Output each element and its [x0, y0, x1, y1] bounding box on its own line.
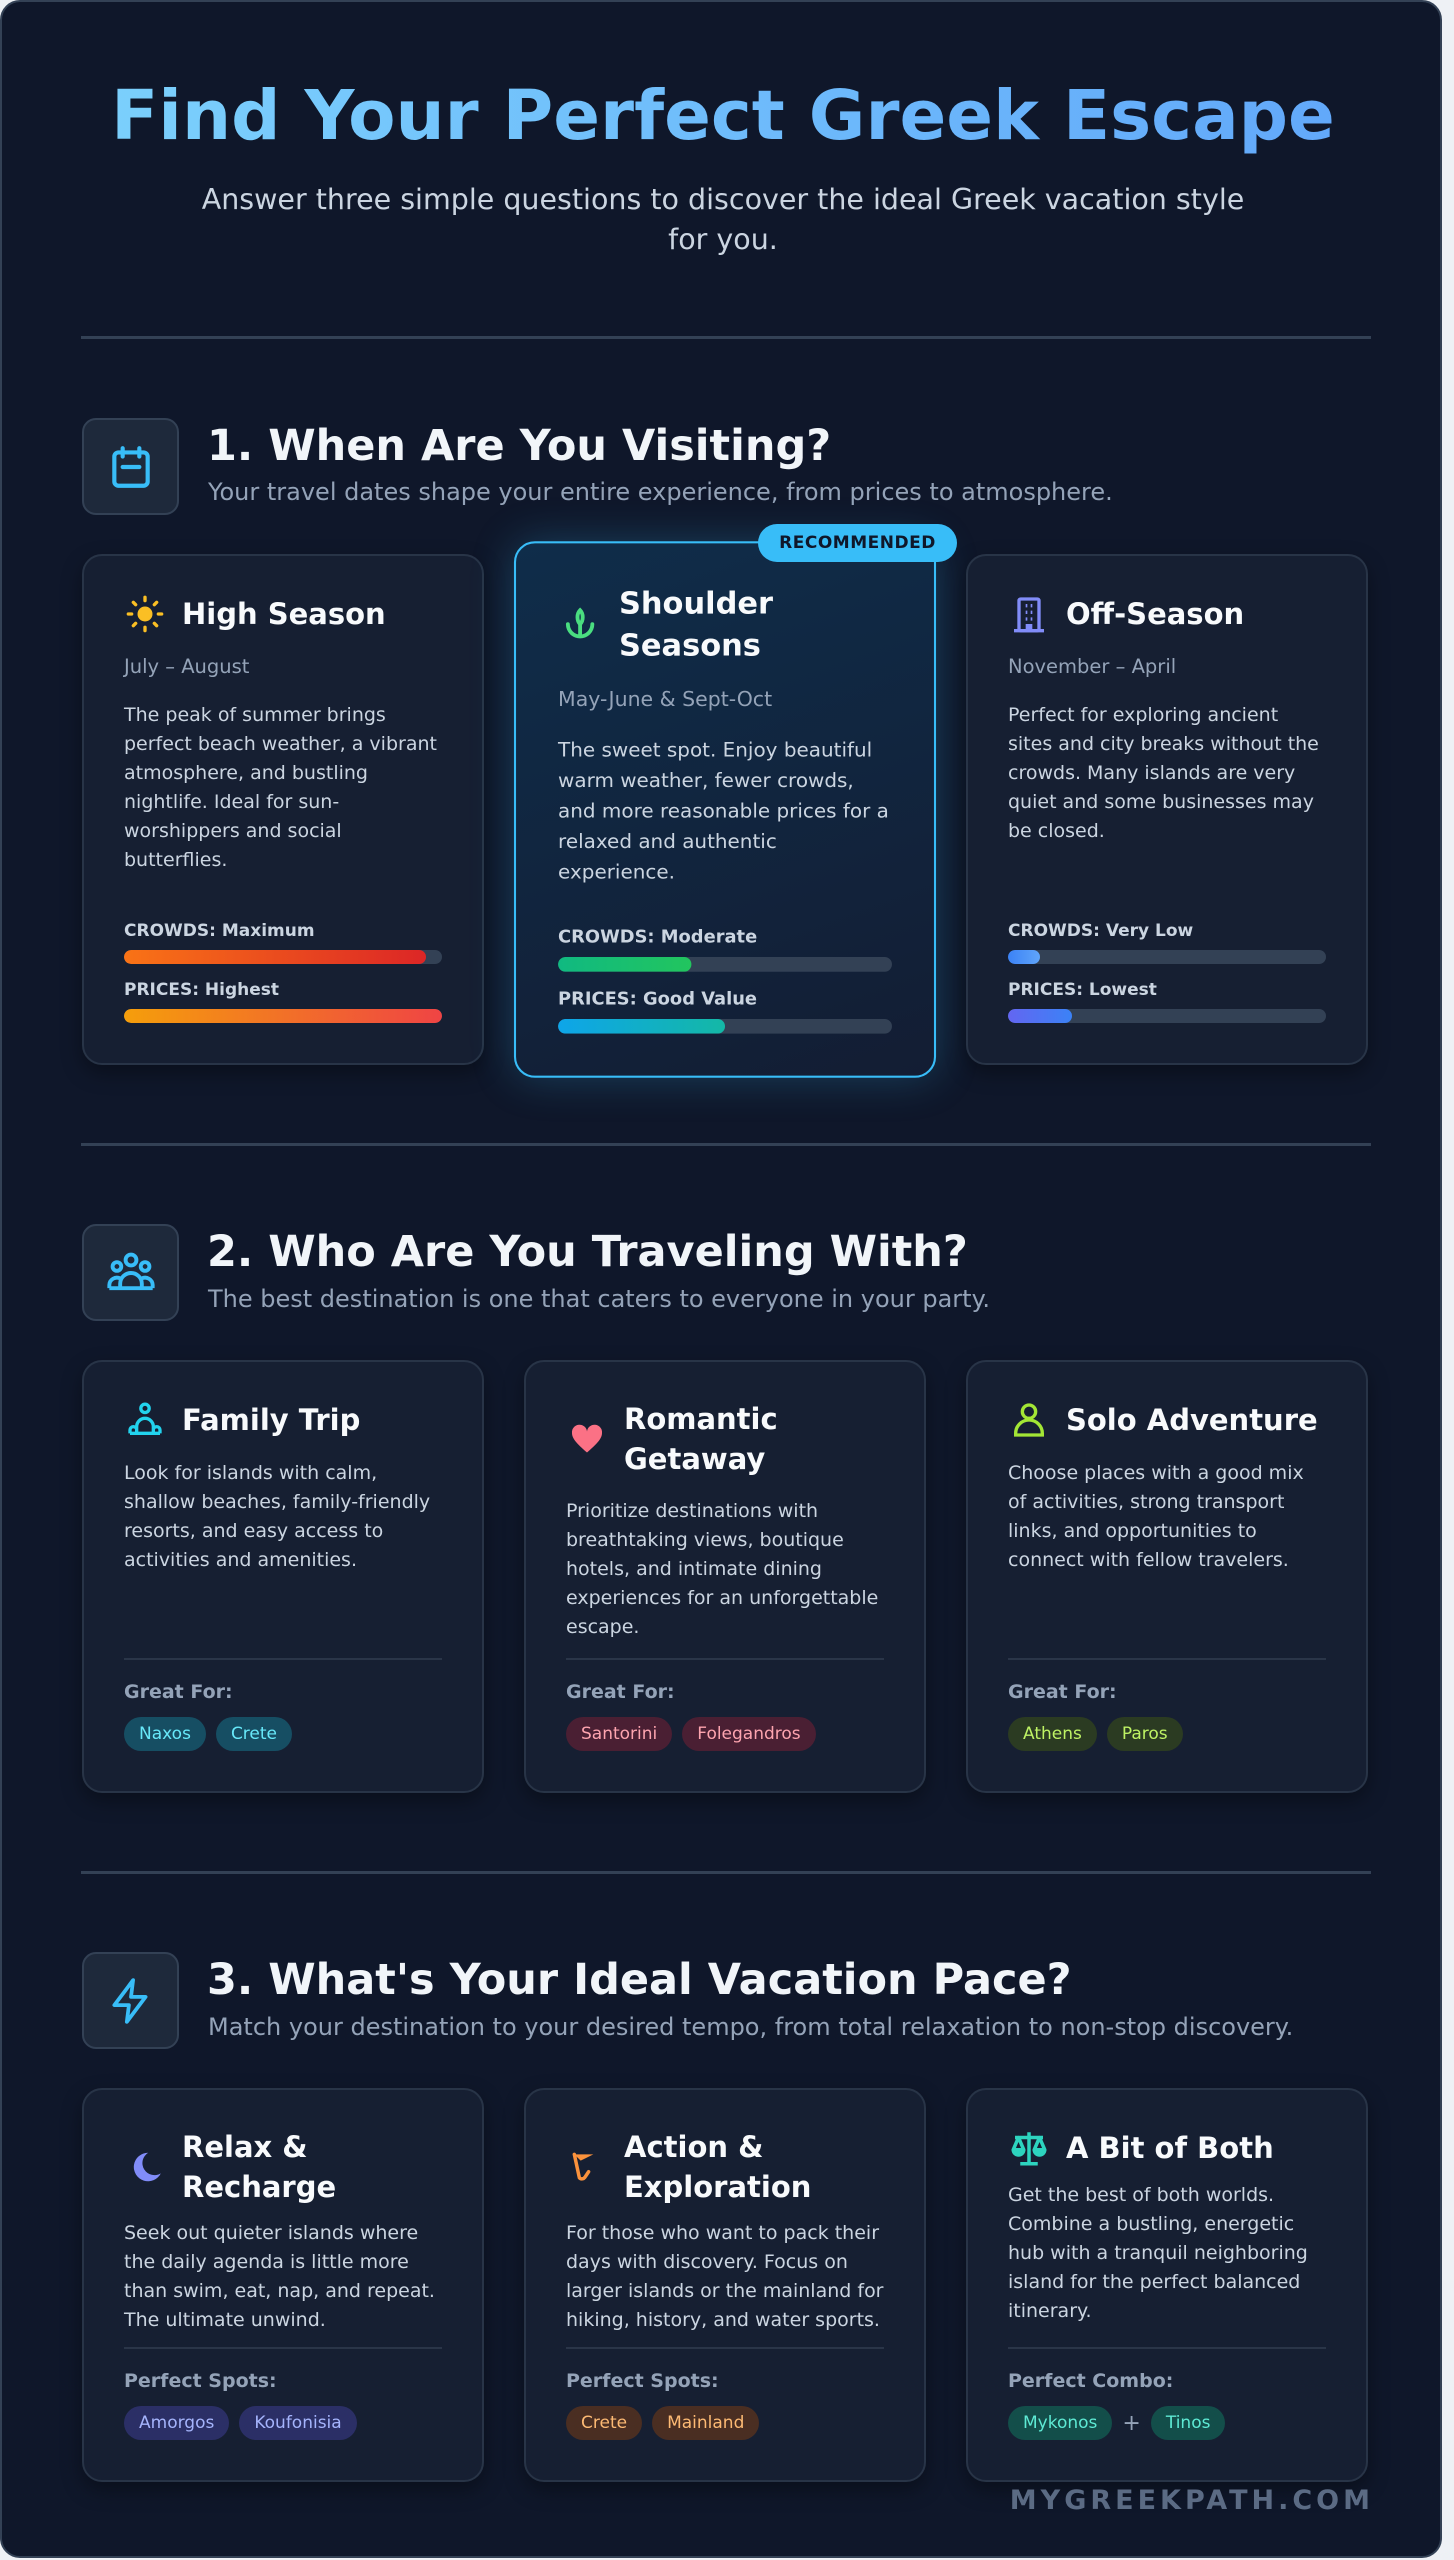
card title: both: A Bit of Both: [1066, 2131, 1274, 2165]
card: shoulder seasons (recommended): [514, 541, 936, 1078]
meters: off-season: CROWDS: Very Low: [1008, 921, 1193, 941]
footer: perfect spots relax: Amorgos: [139, 2413, 214, 2433]
card title: off-season: Off-Season: [1066, 597, 1244, 631]
card: action: For those who want to pack their days with discovery. Focus on larger islands or the mainland for hiking, history, and water sports.: [566, 2222, 884, 2331]
footer: perfect combo: Mykonos: [1023, 2413, 1097, 2433]
icon: lightning section 3: [82, 1952, 179, 2049]
icon: people section 2: [82, 1224, 179, 1321]
footer: perfect combo: +: [1122, 2410, 1141, 2436]
meters: off-season: [1008, 921, 1326, 1023]
card: solo adventure: Choose places with a good mix of activities, strong transport links, and opportunities to connect with fellow travelers.: [1008, 1462, 1304, 1571]
footer: perfect combo: [1008, 2347, 1326, 2440]
meters: shoulder: PRICES: Good Value: [558, 989, 757, 1010]
card: off-season: [966, 554, 1368, 1065]
card: off-season: Perfect for exploring ancient sites and city breaks without the crowds. Many islands are very quiet and some businesses may be closed.: [1008, 704, 1319, 842]
badge: recommended: RECOMMENDED: [779, 533, 936, 553]
card: relax: Seek out quieter islands where the daily agenda is little more than swim, eat, nap, and repeat. The ultimate unwind.: [124, 2222, 435, 2331]
subheading section 3: Match your destination to your desired tempo, from total relaxation to non-stop discovery.: [208, 2013, 1293, 2041]
heading section 1: 1. When Are You Visiting?: [207, 421, 831, 471]
card: shoulder seasons (recommended): The sweet spot. Enjoy beautiful warm weather, fewer crowds, and more reasonable prices for a relaxed and authentic experience.: [558, 739, 889, 884]
footer: perfect spots action: Crete: [581, 2413, 627, 2433]
meters: high season: CROWDS: Maximum: [124, 921, 315, 941]
footer: great for romantic: [566, 1658, 884, 1751]
footer: perfect spots relax: Perfect Spots:: [124, 2370, 277, 2392]
footer: great for family: Naxos: [139, 1724, 191, 1744]
footer: great for romantic: Great For:: [566, 1681, 675, 1703]
footer: perfect spots relax: [124, 2347, 442, 2440]
footer: great for family: [124, 1658, 442, 1751]
footer: great for solo: Great For:: [1008, 1681, 1117, 1703]
footer: perfect spots action: [566, 2347, 884, 2440]
card title: high season: High Season: [182, 597, 386, 631]
card: shoulder seasons (recommended): May-June & Sept-Oct: [558, 687, 772, 711]
footer: perfect spots action: Mainland: [667, 2413, 744, 2433]
title: Find Your Perfect Greek Escape: [111, 76, 1335, 156]
footer: great for solo: [1008, 1658, 1326, 1751]
card: high season: The peak of summer brings perfect beach weather, a vibrant atmosphere, and bustling nightlife. Ideal for sun-worshippers and social butterflies.: [124, 704, 437, 871]
footer: perfect spots action: Perfect Spots:: [566, 2370, 719, 2392]
card: relax: [82, 2088, 484, 2482]
meters: off-season: PRICES: Lowest: [1008, 980, 1157, 1000]
badge: recommended: [758, 524, 957, 562]
subtitle: Answer three simple questions to discover the ideal Greek vacation style for you.: [202, 183, 1244, 256]
card: romantic getaway: [524, 1360, 926, 1793]
card title: shoulder: Shoulder Seasons: [619, 585, 773, 663]
meters: shoulder: [558, 927, 892, 1034]
footer: great for romantic: Folegandros: [697, 1724, 801, 1744]
footer: great for family: Crete: [231, 1724, 277, 1744]
card: a bit of both: Get the best of both worlds. Combine a bustling, energetic hub with a tranquil neighboring island for the perfect balanced itinerary.: [1008, 2184, 1308, 2322]
card: romantic getaway: Prioritize destinations with breathtaking views, boutique hotels, and intimate dining experiences for an unforgettable escape.: [566, 1500, 878, 1638]
meters: shoulder: CROWDS: Moderate: [558, 927, 757, 948]
meters: high season: [124, 921, 442, 1023]
card title: romantic: Romantic Getaway: [624, 1402, 778, 1476]
subheading section 2: The best destination is one that caters to everyone in your party.: [208, 1285, 990, 1313]
card title: family: Family Trip: [182, 1403, 360, 1437]
icon: calendar section 1: [82, 418, 179, 515]
card: family trip: [82, 1360, 484, 1793]
footer: great for romantic: Santorini: [581, 1724, 657, 1744]
footer: great for solo: Athens: [1023, 1724, 1082, 1744]
card title: relax: Relax & Recharge: [182, 2130, 336, 2204]
footer: great for solo: Paros: [1122, 1724, 1168, 1744]
card title: action: Action & Exploration: [624, 2130, 811, 2204]
meters: high season: PRICES: Highest: [124, 980, 279, 1000]
footer: great for family: Great For:: [124, 1681, 233, 1703]
card title: solo: Solo Adventure: [1066, 1403, 1318, 1437]
card: family trip: Look for islands with calm, shallow beaches, family-friendly resorts, and easy access to activities and amenities.: [124, 1462, 430, 1571]
card: off-season: November – April: [1008, 655, 1176, 678]
card: solo adventure: [966, 1360, 1368, 1793]
card: a bit of both: [966, 2088, 1368, 2482]
footer brand: MYGREEKPATH.COM: [1010, 2485, 1374, 2516]
card: action: [524, 2088, 926, 2482]
footer: perfect combo: Perfect Combo:: [1008, 2370, 1173, 2392]
subheading section 1: Your travel dates shape your entire experience, from prices to atmosphere.: [208, 478, 1113, 506]
footer: perfect combo: Tinos: [1166, 2413, 1210, 2433]
footer: perfect spots relax: Koufonisia: [254, 2413, 342, 2433]
heading section 3: 3. What's Your Ideal Vacation Pace?: [207, 1955, 1072, 2005]
heading section 2: 2. Who Are You Traveling With?: [207, 1227, 968, 1277]
card: high season: July – August: [124, 655, 249, 678]
card: high season: [82, 554, 484, 1065]
